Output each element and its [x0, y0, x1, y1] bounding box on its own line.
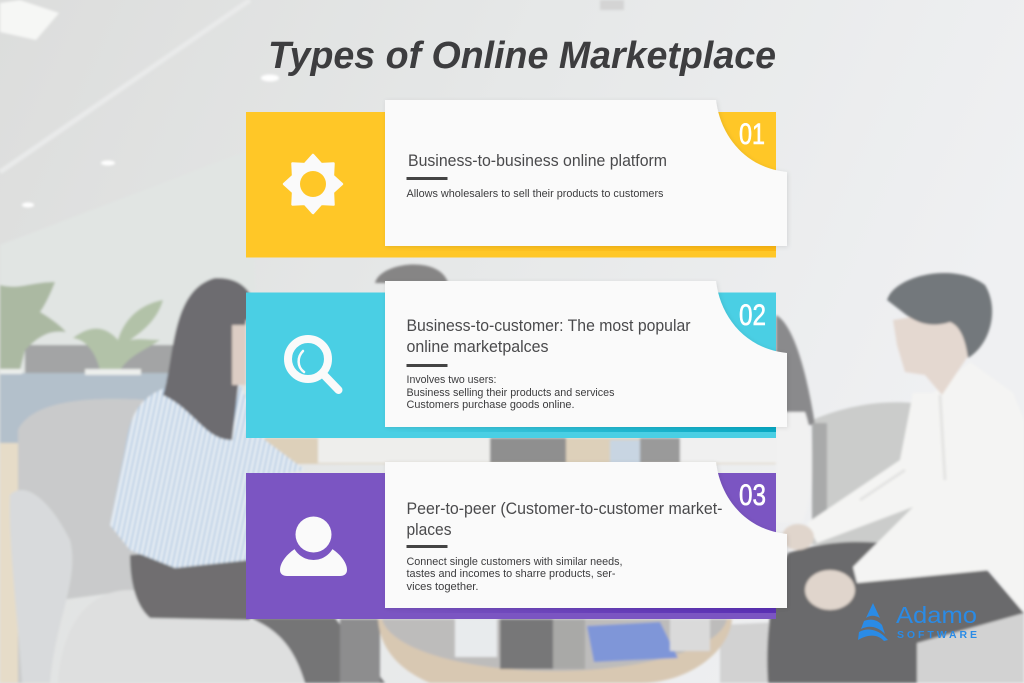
back people: [375, 265, 448, 283]
panel: 03 peer-to-peer: [246, 462, 787, 619]
man shirt: [807, 362, 1024, 613]
heading 02: Business-to-customer: The most popular: [406, 316, 691, 335]
body 03: [406, 556, 622, 593]
man thigh and leg: [767, 542, 900, 683]
number 01: 01: [739, 118, 765, 151]
woman hair: [163, 278, 258, 440]
panel card: [385, 462, 787, 608]
panel background cyan: [246, 292, 776, 438]
title: Types of Online Marketplace: [268, 35, 776, 77]
body 03: tastes and incomes to sharre products, ser-: [406, 568, 616, 580]
woman pants: [130, 545, 250, 620]
body 02: Involves two users:: [406, 374, 496, 386]
panel background purple: [246, 473, 776, 619]
number 03: 03: [739, 479, 766, 512]
logo: Adamo Software: [858, 602, 977, 641]
panel: 02 business-to-customer: [246, 281, 787, 438]
ceiling and wall: [0, 150, 260, 400]
body 01: Allows wholesalers to sell their products to customers: [406, 188, 664, 200]
table: [340, 619, 380, 683]
body 03: Connect single customers with similar needs,: [406, 556, 622, 568]
plants: [0, 282, 66, 370]
panel: 02 business-to-customer: online marketpalces: [406, 337, 548, 356]
heading 01: Business-to-business online platform: [408, 151, 667, 170]
panel: 03 peer-to-peer: places: [406, 520, 452, 539]
body 02: Customers purchase goods online.: [406, 399, 574, 411]
woman shirt: [110, 385, 305, 568]
logo: Adamo Software: SOFTWARE: [897, 629, 977, 641]
body 03: vices together.: [406, 581, 478, 593]
heading 03: Peer-to-peer (Customer-to-customer market-: [406, 499, 722, 518]
icon: logo mark: [858, 603, 888, 641]
icon: magnifier: [288, 339, 338, 390]
left chair: [18, 399, 150, 683]
body 02: Business selling their products and services: [406, 387, 615, 399]
body 02: [406, 374, 615, 411]
panel: 01 business-to-business: [246, 100, 787, 258]
logo: Adamo Software: Adamo: [896, 602, 977, 628]
man hands: [782, 524, 814, 550]
sofa right: [812, 402, 930, 545]
panel card: [385, 281, 787, 427]
monitors, counter, wood: [25, 345, 175, 373]
icon: person: [280, 516, 347, 576]
man head: [893, 310, 972, 395]
icon: gear: [284, 155, 342, 213]
panel card: [385, 100, 787, 246]
number 02: 02: [739, 299, 766, 332]
panel background yellow: [246, 112, 776, 258]
